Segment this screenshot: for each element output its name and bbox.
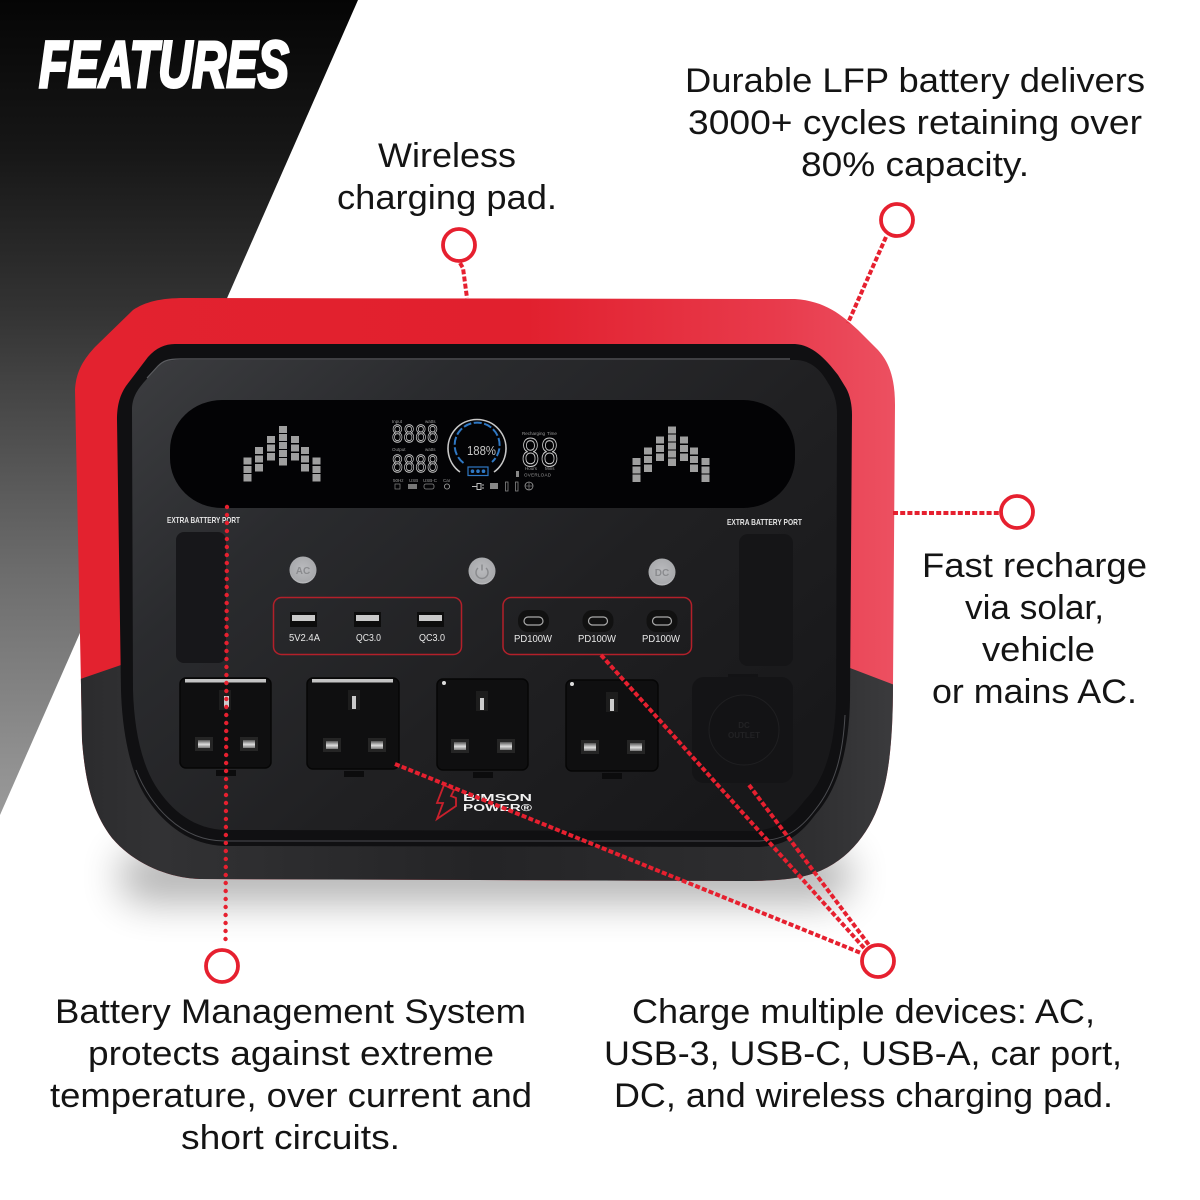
DC button: DC: [655, 568, 669, 579]
callout text: battery management system: [50, 993, 532, 1157]
DC button: [648, 558, 676, 586]
AC button: [290, 556, 316, 584]
AC socket 3: [437, 679, 528, 778]
USB-C port group: [503, 598, 692, 654]
power button: [468, 558, 496, 584]
left extra battery port: [167, 515, 241, 663]
callout text: battery management system: temperature, over current and: [50, 1077, 532, 1115]
USB-A port group: QC3.0: [419, 633, 445, 644]
callout text: fast recharge: Fast recharge: [922, 547, 1147, 585]
brand logo: POWER®: [463, 802, 532, 814]
LCD readouts: 88: [521, 431, 559, 479]
callout text: LFP battery: 80% capacity.: [801, 146, 1029, 184]
LCD readouts: Hours: [525, 466, 538, 471]
brand logo: [437, 785, 532, 819]
LCD readouts: Time: [547, 431, 557, 436]
callout text: LFP battery: [685, 62, 1145, 184]
AC socket 4: [566, 680, 658, 779]
LCD readouts: [392, 419, 559, 491]
AC button: AC: [296, 566, 310, 577]
LCD readouts: 188%: [467, 443, 496, 458]
USB-A port group: 5V2.4A: [289, 633, 320, 644]
callout text: fast recharge: [922, 547, 1147, 711]
right extra battery port: [727, 517, 803, 666]
LCD readouts: Recharging: [522, 431, 546, 436]
AC socket 1: [180, 678, 271, 776]
connector: LFP battery: [848, 204, 913, 323]
connector: wireless charging pad: [443, 229, 475, 298]
DC outlet cover: OUTLET: [728, 731, 760, 740]
callout text: charge multiple devices: DC, and wireless charging pad.: [614, 1077, 1113, 1115]
USB-A port group: QC3.0: [356, 633, 381, 644]
brand logo: BIMSON: [463, 792, 532, 804]
LCD readouts: 8888: [392, 420, 438, 450]
bezel highlight: [136, 715, 845, 841]
callout text: fast recharge: vehicle: [982, 631, 1095, 669]
red upper housing: [75, 298, 895, 881]
callout text: LFP battery: 3000+ cycles retaining over: [688, 104, 1142, 142]
DC outlet cover: DC: [738, 721, 750, 730]
LCD readouts: watts: [425, 447, 436, 452]
plate top highlight: [147, 359, 790, 378]
background dark diagonal panel: [0, 0, 358, 815]
callout text: LFP battery: Durable LFP battery delivers: [685, 62, 1145, 100]
USB-A port group: [274, 598, 462, 654]
LCD readouts: USB-C: [423, 478, 438, 483]
callout text: wireless charging pad: Wireless: [378, 137, 516, 175]
callout text: fast recharge: via solar,: [965, 589, 1104, 627]
callout text: fast recharge: or mains AC.: [932, 673, 1137, 711]
callout text: battery management system: short circuits.: [181, 1119, 400, 1157]
right bargraph: [632, 426, 710, 482]
LCD readouts: Mins: [545, 466, 555, 471]
USB-C port group: PD100W: [642, 634, 681, 645]
USB-C port group: PD100W: [514, 634, 553, 645]
display panel: [170, 400, 795, 508]
LCD readouts: USB: [409, 478, 418, 483]
front plate: [132, 360, 837, 831]
DC outlet cover: [692, 674, 793, 783]
callout text: wireless charging pad: charging pad.: [337, 179, 557, 217]
connector: fast recharge: [893, 496, 1033, 528]
gauge: [448, 420, 506, 472]
title: FEATURES: [39, 27, 289, 101]
LCD readouts: OVERLOAD: [524, 472, 552, 478]
LCD readouts: Car: [443, 478, 451, 483]
power station: [75, 298, 895, 881]
USB-C port group: PD100W: [578, 634, 617, 645]
connector: battery management system: [206, 507, 238, 982]
callout text: charge multiple devices: [604, 993, 1122, 1115]
left extra battery port: EXTRA BATTERY PORT: [167, 515, 241, 525]
ground shadow: [120, 850, 850, 902]
callout text: battery management system: protects against extreme: [88, 1035, 494, 1073]
LCD readouts: 8888: [392, 450, 438, 480]
LCD readouts: 50Hz: [393, 478, 404, 483]
black lower housing: [80, 665, 893, 881]
LCD readouts: Input: [392, 419, 403, 424]
callout text: battery management system: Battery Management System: [55, 993, 526, 1031]
connector: multiple devices: [395, 655, 894, 977]
AC socket 2: [307, 678, 399, 777]
front bezel: [117, 344, 852, 847]
left bargraph: [244, 426, 320, 482]
callout text: wireless charging pad: [337, 137, 557, 217]
callout text: charge multiple devices: USB-3, USB-C, USB-A, car port,: [604, 1035, 1122, 1073]
right extra battery port: EXTRA BATTERY PORT: [727, 517, 803, 527]
LCD readouts: watts: [425, 419, 436, 424]
LCD readouts: Output: [392, 447, 406, 452]
callout text: charge multiple devices: Charge multiple devices: AC,: [632, 993, 1095, 1031]
